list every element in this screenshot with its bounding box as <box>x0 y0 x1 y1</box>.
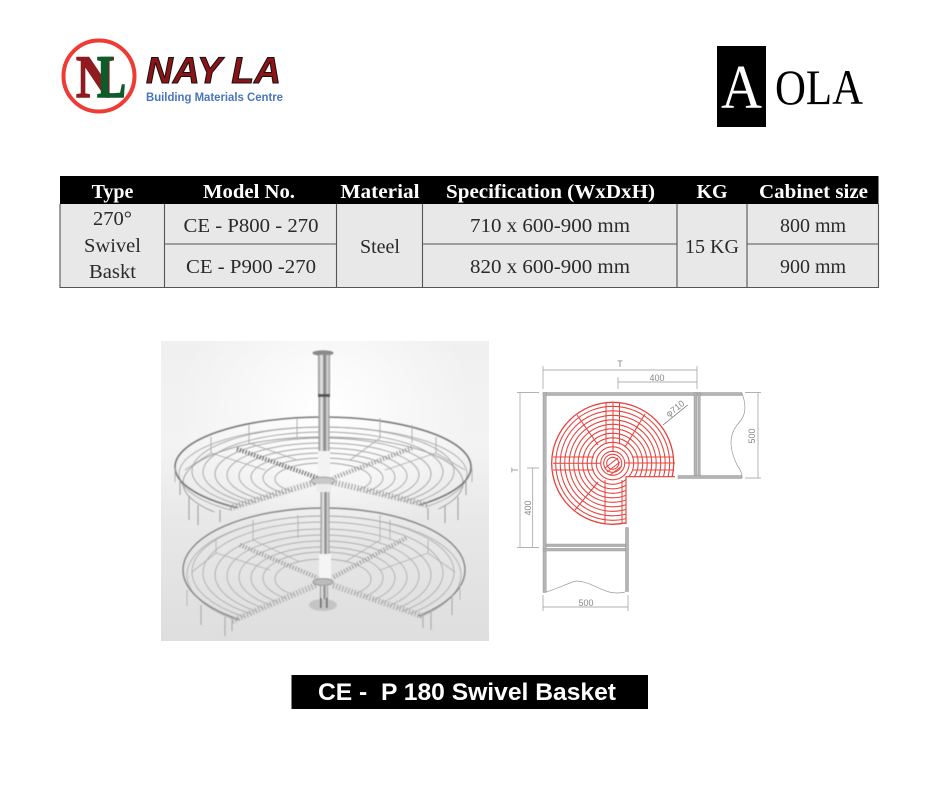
table header row: Model No. <box>203 181 295 203</box>
central pole <box>309 350 337 611</box>
logo: AOLA: A <box>721 54 762 122</box>
lower basket <box>183 508 465 636</box>
logo emblem: NL in red circle: N <box>76 44 114 110</box>
dimension labels: 500 <box>747 428 757 444</box>
product title banner: CE - P 180 Swivel Basket <box>318 679 616 706</box>
table cell: weight: 15 KG <box>685 236 739 258</box>
table header row: Specification (WxDxH) <box>446 181 655 203</box>
dimension labels: 400 <box>523 500 533 516</box>
table cells: model numbers <box>184 215 318 278</box>
table header row: Material <box>340 181 420 203</box>
dimension labels: φ710 <box>664 398 686 419</box>
table cell: type: Baskt <box>89 261 136 283</box>
dimension lines <box>517 366 761 611</box>
table header row: Cabinet size <box>759 181 868 203</box>
table header row <box>60 176 878 204</box>
table cells: specification <box>470 215 630 278</box>
product title banner <box>292 675 648 709</box>
logo emblem: NL in red circle <box>64 40 134 112</box>
table cells: model numbers: CE - P800 - 270 <box>184 215 318 237</box>
dimension labels: 400 <box>649 373 665 383</box>
table cells: specification: 710 x 600-900 mm <box>470 215 630 237</box>
table cell: type: 270° <box>93 208 132 230</box>
table cells: model numbers: CE - P900 -270 <box>186 256 316 278</box>
cabinet walls <box>543 392 742 592</box>
upper basket <box>175 417 472 529</box>
logo: AOLA <box>717 46 863 127</box>
logo: Nay La Building Materials Centre <box>64 40 283 112</box>
table cell: material: Steel <box>360 236 400 258</box>
dimension labels: T <box>510 467 520 473</box>
logo: AOLA: OLA <box>775 59 863 115</box>
logo tagline: Building Materials Centre <box>146 92 283 104</box>
table cells: cabinet size <box>780 215 846 278</box>
table header row: KG <box>696 181 728 203</box>
table cell: type: Swivel <box>84 235 141 257</box>
specification table <box>60 176 878 288</box>
table cells: cabinet size: 900 mm <box>780 256 846 278</box>
table cell: type <box>84 208 141 283</box>
dimension labels <box>510 359 757 608</box>
dimension labels: T <box>617 359 623 369</box>
table header row: Type <box>92 181 134 203</box>
technical drawing: corner cabinet plan <box>510 359 761 611</box>
dimension labels: 500 <box>578 598 594 608</box>
product photo: two-tier swivel basket <box>161 341 489 641</box>
logo wordmark: NAY LA <box>146 50 281 91</box>
table cells: cabinet size: 800 mm <box>780 215 846 237</box>
table cells: specification: 820 x 600-900 mm <box>470 256 630 278</box>
logo emblem: NL in red circle: L <box>97 44 126 110</box>
red basket outline plan <box>552 402 675 524</box>
